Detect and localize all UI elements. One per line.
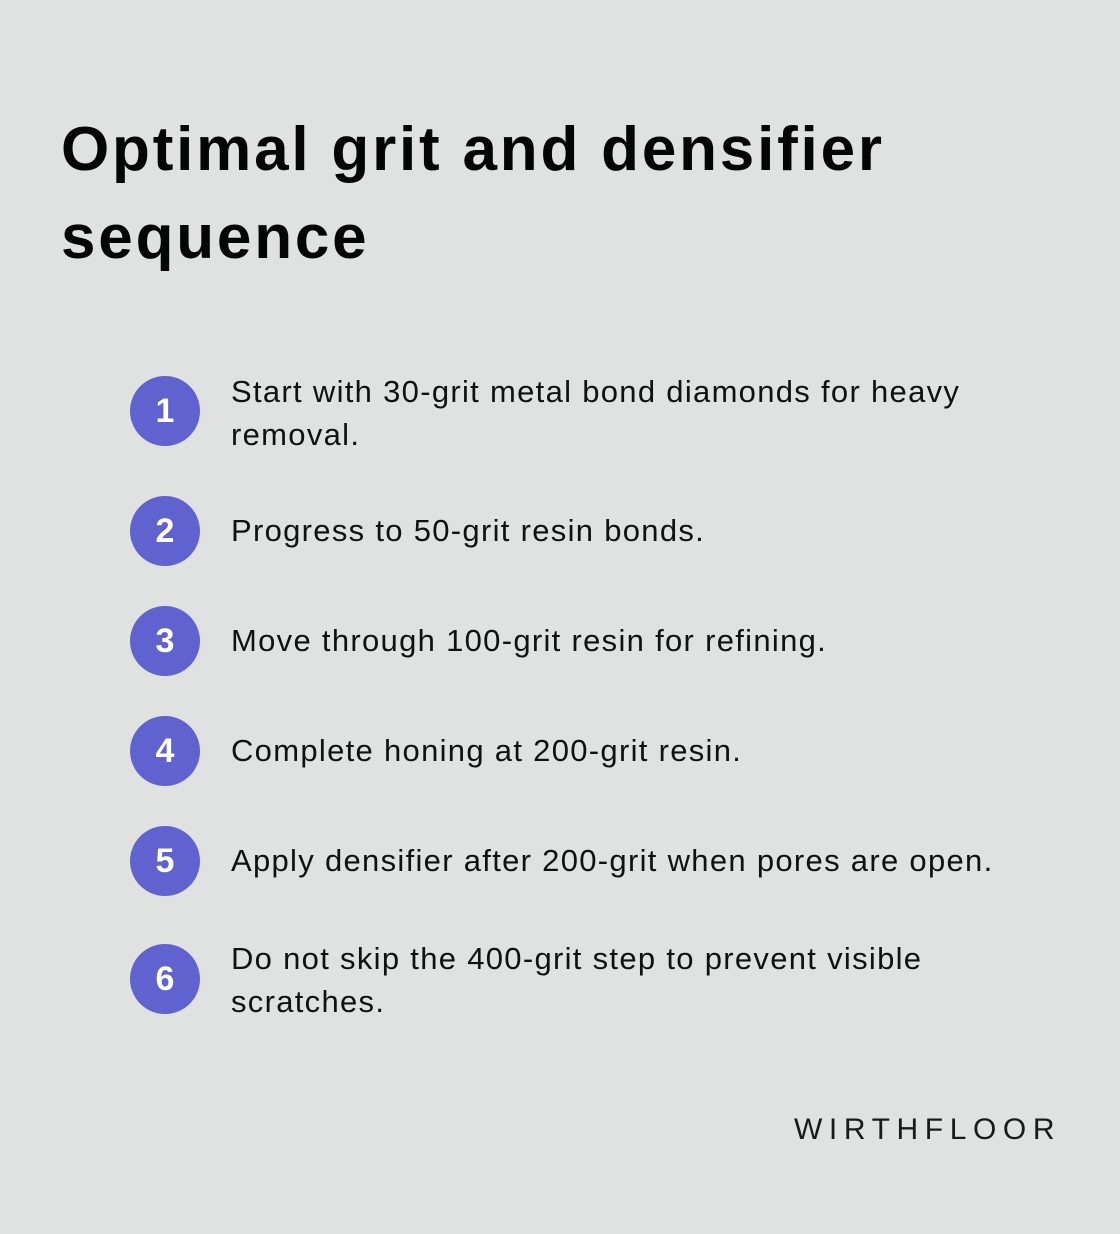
step 6 text	[231, 941, 922, 1019]
number badge 2: 2	[156, 512, 174, 550]
number badge 4	[130, 716, 200, 786]
step 1 text	[231, 374, 960, 452]
number badge 6: 6	[156, 960, 174, 998]
step 4	[130, 716, 742, 786]
logo: WIRTHFLOOR	[794, 1113, 1061, 1146]
number badge 5	[130, 826, 200, 896]
step 4 text: Complete honing at 200-grit resin.	[231, 733, 742, 768]
step 3 text: Move through 100-grit resin for refining.	[231, 623, 827, 658]
step 2	[130, 496, 705, 566]
number badge 2	[130, 496, 200, 566]
title: Optimal grit and densifier	[61, 115, 885, 184]
step 1 text: removal.	[231, 417, 360, 452]
title: sequence	[61, 203, 369, 272]
step 6 text: Do not skip the 400-grit step to prevent visible	[231, 941, 922, 976]
step 2 text: Progress to 50-grit resin bonds.	[231, 513, 705, 548]
title	[61, 115, 885, 272]
number badge 6	[130, 944, 200, 1014]
number badge 1: 1	[156, 392, 174, 430]
step 6	[130, 941, 922, 1019]
number badge 1	[130, 376, 200, 446]
step 3	[130, 606, 827, 676]
step 5	[130, 826, 993, 896]
number badge 4: 4	[156, 732, 174, 770]
number badge 3: 3	[156, 622, 174, 660]
step 1	[130, 374, 960, 452]
number badge 3	[130, 606, 200, 676]
number badge 5: 5	[156, 842, 174, 880]
step 5 text: Apply densifier after 200-grit when pores are open.	[231, 843, 993, 878]
step 6 text: scratches.	[231, 984, 385, 1019]
step 1 text: Start with 30-grit metal bond diamonds for heavy	[231, 374, 960, 409]
